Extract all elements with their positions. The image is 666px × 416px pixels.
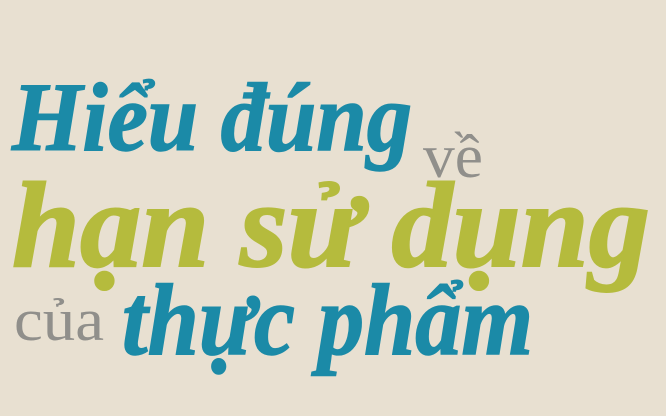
connector word: về: về [423, 123, 483, 191]
heading line 3: thực phẩm: thực phẩm [122, 264, 533, 377]
heading line 2: hạn sử dụng: hạn sử dụng [12, 158, 650, 293]
heading line 1: Hiểu đúng: Hiểu đúng [11, 64, 412, 172]
connector word: của: của [14, 287, 104, 353]
